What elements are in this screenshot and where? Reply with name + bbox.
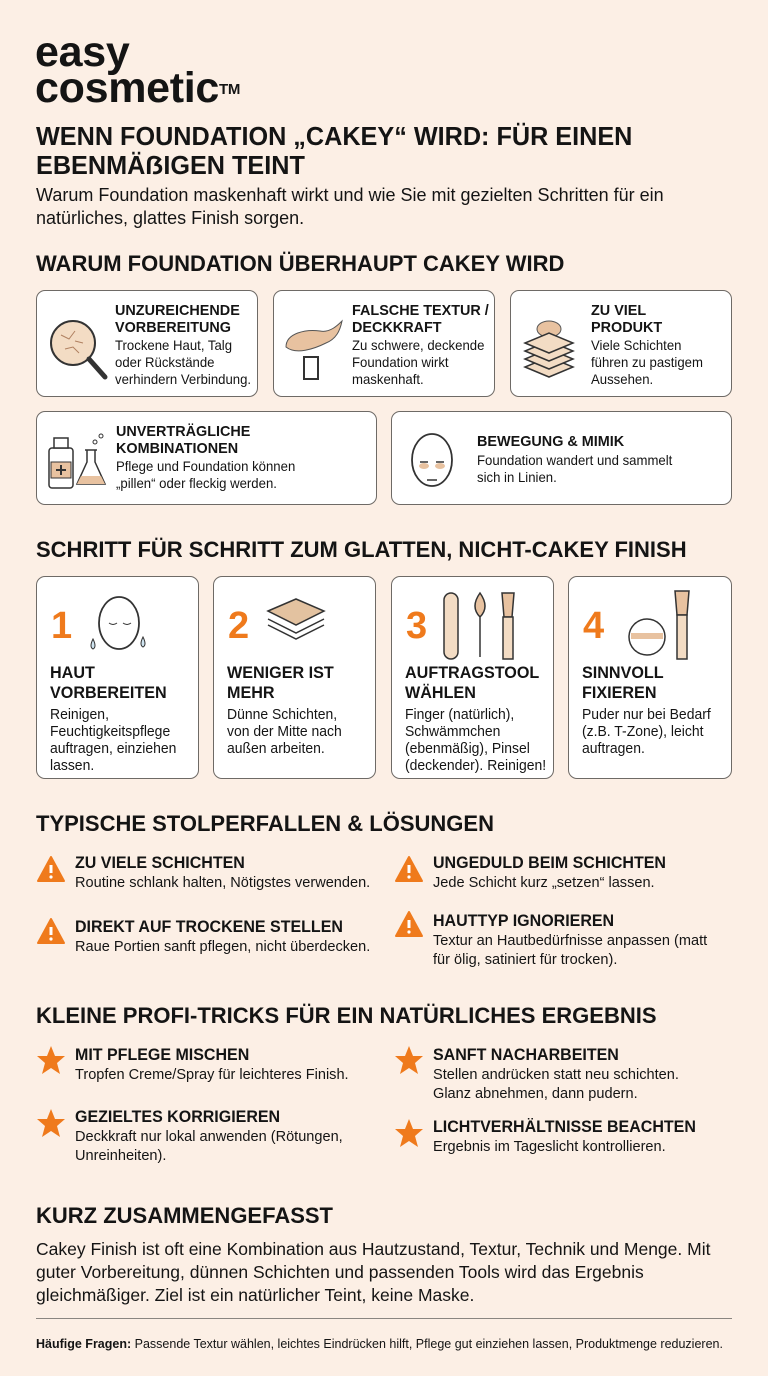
summary text: gleichmäßiger. Ziel ist ein natürlicher Teint, keine Maske. [36, 1285, 474, 1305]
trick 2 [433, 1046, 679, 1102]
card: unverträgliche kombinationen: UNVERTRÄGLICHE [116, 423, 250, 440]
step 2: von der Mitte nach [227, 723, 342, 740]
pitfall 2: Jede Schicht kurz „setzen“ lassen. [433, 874, 655, 891]
card: bewegung & mimik: Foundation wandert und sammelt [477, 452, 672, 468]
icon: face [411, 433, 453, 487]
icon: face with drops [90, 596, 146, 650]
step 3: Finger (natürlich), [405, 706, 514, 723]
summary text: guter Vorbereitung, dünnen Schichten und passenden Tools wird das Ergebnis [36, 1262, 644, 1282]
step 4: FIXIEREN [582, 683, 656, 702]
card: falsche textur [273, 290, 495, 397]
card: unzureichende vorbereitung: verhindern Verbindung. [115, 371, 251, 387]
card: falsche textur: DECKKRAFT [352, 319, 442, 336]
section heading: summary: KURZ ZUSAMMENGEFASST [36, 1203, 333, 1228]
icon: layers [523, 320, 575, 378]
step 2: MEHR [227, 683, 275, 702]
step 1: Feuchtigkeitspflege [50, 723, 170, 740]
icon: star [395, 1119, 423, 1147]
card: bewegung & mimik: sich in Linien. [477, 469, 557, 485]
step 3: (ebenmäßig), Pinsel [405, 740, 530, 757]
title: WENN FOUNDATION „CAKEY“ WIRD: FÜR EINEN [36, 121, 632, 151]
pitfall 3: DIREKT AUF TROCKENE STELLEN [75, 918, 343, 936]
icon: foundation swatch [286, 320, 343, 380]
subtitle: Warum Foundation maskenhaft wirkt und wie Sie mit gezielten Schritten für ein [36, 185, 664, 205]
step 4 [568, 576, 732, 779]
section heading: tricks: KLEINE PROFI-TRICKS FÜR EIN NATÜRLICHES ERGEBNIS [36, 1003, 657, 1028]
summary text: Cakey Finish ist oft eine Kombination aus Hautzustand, Textur, Technik und Menge. Mit [36, 1239, 710, 1259]
footnote: Häufige Fragen: Passende Textur wählen, leichtes Eindrücken hilft, Pflege gut einziehen lassen, Produktmenge reduzieren. [36, 1337, 723, 1351]
trick 3 [75, 1108, 343, 1164]
card: unzureichende vorbereitung: VORBEREITUNG [115, 319, 231, 336]
pitfall 4: für ölig, satiniert für trocken). [433, 951, 617, 968]
card: falsche textur: Zu schwere, deckende [352, 337, 484, 353]
pitfall 3: Raue Portien sanft pflegen, nicht überdecken. [75, 938, 370, 955]
section heading: steps: SCHRITT FÜR SCHRITT ZUM GLATTEN, NICHT-CAKEY FINISH [36, 537, 687, 562]
icon: star [37, 1046, 65, 1074]
step 2: außen arbeiten. [227, 740, 325, 757]
step 3: AUFTRAGSTOOL [405, 663, 539, 682]
card: unverträgliche kombinationen [36, 411, 377, 505]
pitfall 1: Routine schlank halten, Nötigstes verwenden. [75, 874, 370, 891]
step 1: lassen. [50, 757, 94, 774]
step 1: HAUT [50, 663, 95, 682]
card: falsche textur: Foundation wirkt [352, 354, 449, 370]
step 2: WENIGER IST [227, 663, 334, 682]
icon: star [37, 1109, 65, 1137]
pitfall 1: ZU VIELE SCHICHTEN [75, 854, 245, 872]
icon: warning [37, 918, 65, 944]
trick 4: Ergebnis im Tageslicht kontrollieren. [433, 1138, 666, 1155]
pitfall 4: Textur an Hautbedürfnisse anpassen (matt [433, 932, 707, 949]
card: zu viel produkt: führen zu pastigem [591, 354, 703, 370]
pitfall 2: UNGEDULD BEIM SCHICHTEN [433, 854, 666, 872]
trick 1: Tropfen Creme/Spray für leichteres Finish. [75, 1066, 349, 1083]
step 2 [213, 576, 376, 779]
icon: warning [395, 856, 423, 882]
trick 3: Deckkraft nur lokal anwenden (Rötungen, [75, 1128, 343, 1145]
trick 2: Glanz abnehmen, dann pudern. [433, 1085, 638, 1102]
card: bewegung & mimik: BEWEGUNG & MIMIK [477, 433, 624, 450]
card: falsche textur: FALSCHE TEXTUR / [352, 302, 489, 319]
logo [35, 28, 240, 112]
step 1: 1 [51, 605, 72, 647]
pitfall 4: HAUTTYP IGNORIEREN [433, 912, 614, 930]
icon: magnifier [50, 320, 108, 380]
section heading: causes: WARUM FOUNDATION ÜBERHAUPT CAKEY WIRD [36, 251, 564, 276]
trick 2: Stellen andrücken statt neu schichten. [433, 1066, 679, 1083]
step 3: Schwämmchen [405, 723, 500, 740]
logo: cosmeticTM [35, 64, 240, 112]
panel: pitfalls [37, 854, 708, 968]
title: EBENMÄẞIGEN TEINT [36, 150, 305, 180]
icon: layers [266, 598, 326, 640]
step 1: auftragen, einziehen [50, 740, 176, 757]
card: zu viel produkt: ZU VIEL [591, 302, 646, 319]
trick 3: Unreinheiten). [75, 1147, 166, 1164]
step 4: (z.B. T-Zone), leicht [582, 723, 703, 740]
trick 2: SANFT NACHARBEITEN [433, 1046, 619, 1064]
pitfall 4 [433, 912, 708, 968]
card: unzureichende vorbereitung: UNZUREICHENDE [115, 302, 240, 319]
trick 4: LICHTVERHÄLTNISSE BEACHTEN [433, 1118, 696, 1136]
step 1: VORBEREITEN [50, 683, 167, 702]
subtitle [36, 185, 664, 228]
step 2: Dünne Schichten, [227, 706, 337, 723]
icon: warning [37, 856, 65, 882]
summary text [36, 1239, 710, 1305]
icon: tools [443, 592, 515, 660]
step 1 [36, 576, 199, 779]
step 3 [391, 576, 554, 779]
card: unzureichende vorbereitung [36, 290, 258, 397]
title [36, 121, 632, 180]
step 4: SINNVOLL [582, 663, 664, 682]
card: zu viel produkt [510, 290, 732, 397]
step 4: 4 [583, 605, 604, 647]
step 4: Puder nur bei Bedarf [582, 706, 711, 723]
step 2: 2 [228, 605, 249, 647]
card: unverträgliche kombinationen: KOMBINATIONEN [116, 440, 238, 457]
card: falsche textur: maskenhaft. [352, 371, 424, 387]
subtitle: natürliches, glattes Finish sorgen. [36, 208, 304, 228]
logo: easy [35, 28, 129, 76]
trick 1: MIT PFLEGE MISCHEN [75, 1046, 249, 1064]
pitfall 3 [75, 918, 370, 955]
icon: warning [395, 911, 423, 937]
card: zu viel produkt: Aussehen. [591, 371, 653, 387]
trick 3: GEZIELTES KORRIGIEREN [75, 1108, 280, 1126]
icon: bottles [48, 434, 106, 489]
card: unverträgliche kombinationen: „pillen“ oder fleckig werden. [116, 475, 277, 491]
section heading: pitfalls: TYPISCHE STOLPERFALLEN & LÖSUNGEN [36, 811, 494, 836]
trick 4 [433, 1118, 696, 1155]
card: unzureichende vorbereitung: Trockene Haut, Talg [115, 337, 232, 353]
icon: star [395, 1046, 423, 1074]
panel: steps [36, 576, 732, 779]
step 3: 3 [406, 605, 427, 647]
trick 1 [75, 1046, 349, 1083]
pitfall 2 [433, 854, 666, 891]
panel: causes [36, 290, 732, 505]
panel: tricks [37, 1046, 696, 1164]
card: bewegung & mimik [391, 411, 732, 505]
step 3: (deckender). Reinigen! [405, 757, 546, 774]
card: zu viel produkt: Viele Schichten [591, 337, 681, 353]
step 4: auftragen. [582, 740, 645, 757]
card: unzureichende vorbereitung: oder Rückstände [115, 354, 214, 370]
card: zu viel produkt: PRODUKT [591, 319, 662, 336]
card: unverträgliche kombinationen: Pflege und Foundation können [116, 458, 295, 474]
step 1: Reinigen, [50, 706, 109, 723]
icon: puff and brush [628, 590, 690, 660]
pitfall 1 [75, 854, 370, 891]
step 3: WÄHLEN [405, 683, 476, 702]
